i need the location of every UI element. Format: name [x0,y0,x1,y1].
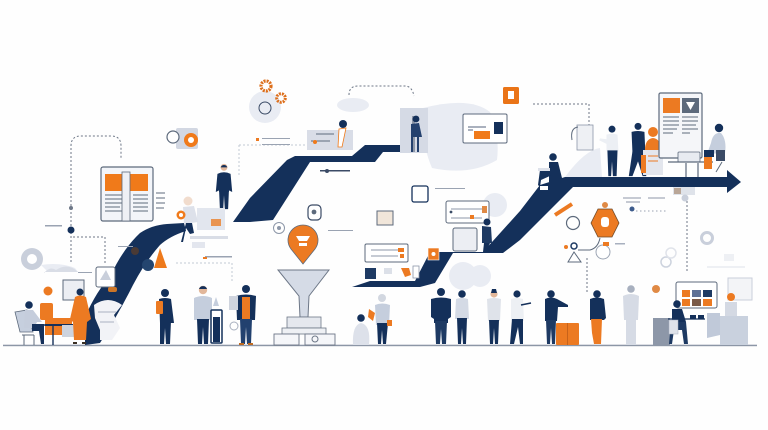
small panel with loop [572,125,593,150]
card: lower form [365,244,419,279]
seated person on first landing [176,196,228,248]
pseudo labels and dots below arrow [623,198,668,212]
desk with monitor and seated person [668,124,726,177]
orange figure and kiosk [641,127,663,175]
person with clipboard [156,289,174,344]
person white shirt on ribbon [599,126,618,176]
icon: G badge and cloud [21,248,78,273]
standing person on first landing [216,164,232,209]
card: upper form with person [446,201,492,252]
ground line [3,345,757,346]
gear and gray icons right [702,232,745,267]
panel: chart card [463,114,507,143]
crowd: person navy top, orange pants [590,290,606,344]
journey ribbon: second rise [233,145,425,222]
person navy suit on ribbon [629,123,646,176]
person with orange folder [368,294,392,344]
dotted connector lines [71,86,687,292]
icon: orange tile [503,87,519,104]
panel: top desk with person [307,120,353,150]
icon: gears [259,81,285,114]
panel: person at board [400,108,428,153]
hexagon badge and icons [555,202,625,262]
small panels above middle ribbon [377,186,428,225]
soft background blobs [41,91,602,290]
journey ribbon: first rise [85,223,186,345]
crowd: person navy suit [545,290,568,344]
journey ribbon: final rise with arrow [352,170,741,287]
person navy jacket, orange vest [236,285,256,345]
icon: orange tile on ribbon [428,248,439,260]
seated person on upper ribbon [538,153,563,190]
small stack beside person [229,296,238,330]
person in orange coat [70,288,91,344]
tag: bag icon [96,267,115,287]
strip below ribbon [673,187,695,202]
icon: phone badge [308,205,321,220]
ribbon details [94,247,167,340]
icon: orange map pin [288,225,318,264]
crowd: person gray shirt [487,289,501,344]
misc pseudo labels [45,138,465,273]
icon: small round target [274,222,284,234]
tower [211,297,222,343]
funnel [274,270,335,345]
panel: open book [101,167,165,221]
node: connector dots [68,206,74,234]
desk scene: seated worker, orange desk [15,280,84,345]
pale standing figure [623,285,639,345]
crowd: person white shirt [510,290,531,344]
seated gray person [353,314,369,345]
crowd: navy person [431,288,451,344]
icon: magnifier G [167,128,198,149]
document panel [659,93,702,158]
person gray shirt [194,286,212,344]
desk scene right [652,248,752,345]
crowd: light shirt person [455,290,469,344]
orange box [556,323,579,345]
